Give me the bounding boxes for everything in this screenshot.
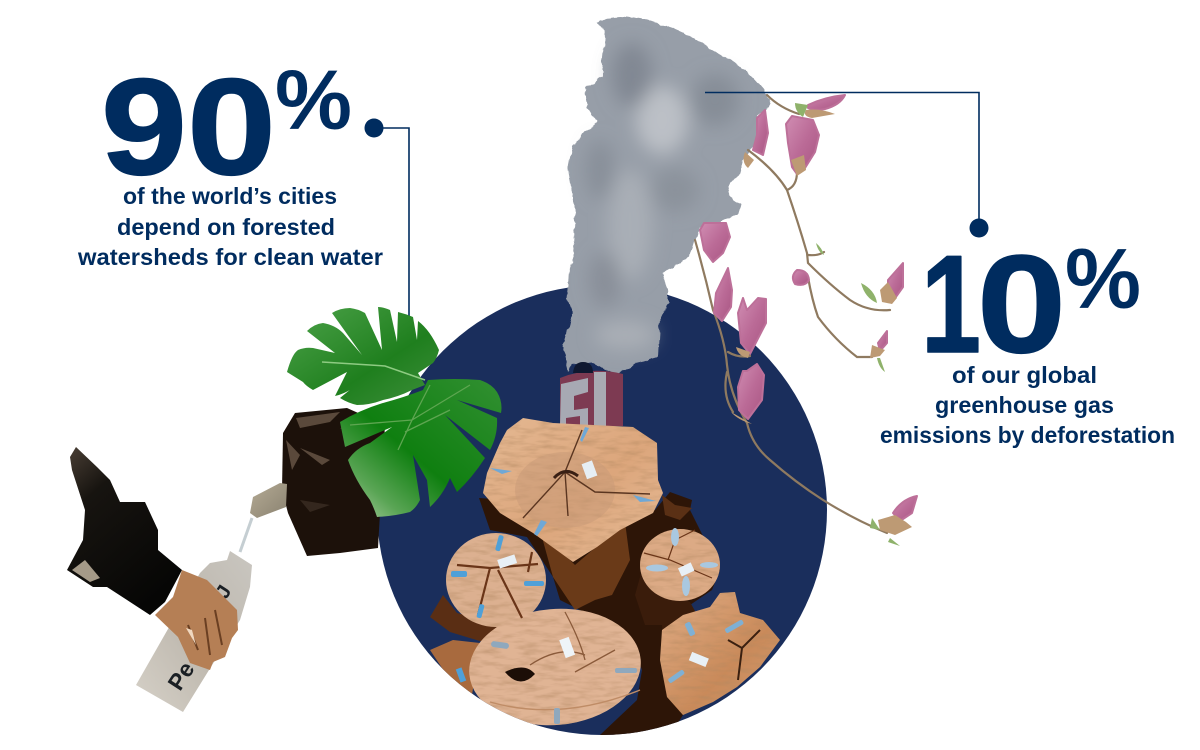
hand gripping bottle — [155, 570, 238, 670]
branch stems — [695, 95, 890, 533]
bark mass behind logs — [479, 492, 720, 640]
big number: one: 1 — [921, 227, 981, 382]
log detail: top large — [490, 427, 656, 536]
connector line: smoke to 10 percent — [705, 92, 988, 238]
log face: bottom right — [660, 592, 780, 715]
log face: right — [640, 529, 720, 601]
log detail: bottom centre — [456, 612, 640, 724]
flower buds — [700, 95, 917, 521]
navy background circle — [377, 285, 827, 735]
caption: greenhouse gas — [935, 392, 1114, 418]
caption — [880, 362, 1175, 448]
small green leaves — [795, 103, 900, 546]
log face: bottom centre — [469, 608, 641, 726]
black sleeve — [67, 447, 182, 615]
bottle logo: Pe — [162, 657, 200, 695]
log detail: left — [451, 535, 544, 619]
metal water bottle — [136, 551, 252, 712]
caption: emissions by deforestation — [880, 422, 1175, 448]
caption: watersheds for clean water — [77, 244, 383, 270]
percent sign: % — [275, 53, 352, 147]
caption: of our global — [952, 362, 1097, 388]
stump bark texture — [286, 412, 380, 512]
chimney — [560, 362, 623, 426]
monstera leaf: lower — [340, 379, 502, 517]
magnolia branch — [695, 95, 917, 546]
stat: 10 percent — [880, 227, 1175, 448]
smoke shading — [586, 43, 739, 349]
stacked logs — [430, 418, 780, 735]
caption: depend on forested — [117, 214, 335, 240]
water stream — [240, 518, 252, 552]
connector line: 90 percent to leaf — [364, 118, 409, 318]
monstera leaf: upper — [287, 307, 439, 405]
metal spout — [250, 483, 287, 518]
log face: top large — [483, 418, 663, 562]
frayed bark left — [430, 595, 497, 642]
stat: 90 percent — [77, 51, 383, 270]
sepals — [731, 110, 912, 535]
caption — [77, 183, 383, 270]
big number: zero: 0 — [187, 51, 276, 204]
big number: zero: 0 — [977, 227, 1066, 382]
percent sign: % — [1065, 232, 1141, 327]
metal water bottle: J — [212, 581, 236, 603]
smoke plume — [563, 17, 770, 375]
log detail: bottom right — [667, 619, 760, 684]
bark between lower logs — [600, 625, 683, 735]
log detail: right — [644, 528, 718, 596]
big number: nine: 9 — [101, 51, 187, 204]
caption: of the world’s cities — [123, 183, 337, 209]
tree stump — [282, 408, 385, 556]
back left small log — [430, 640, 480, 695]
log face: left — [446, 533, 546, 627]
log faces — [446, 418, 780, 732]
